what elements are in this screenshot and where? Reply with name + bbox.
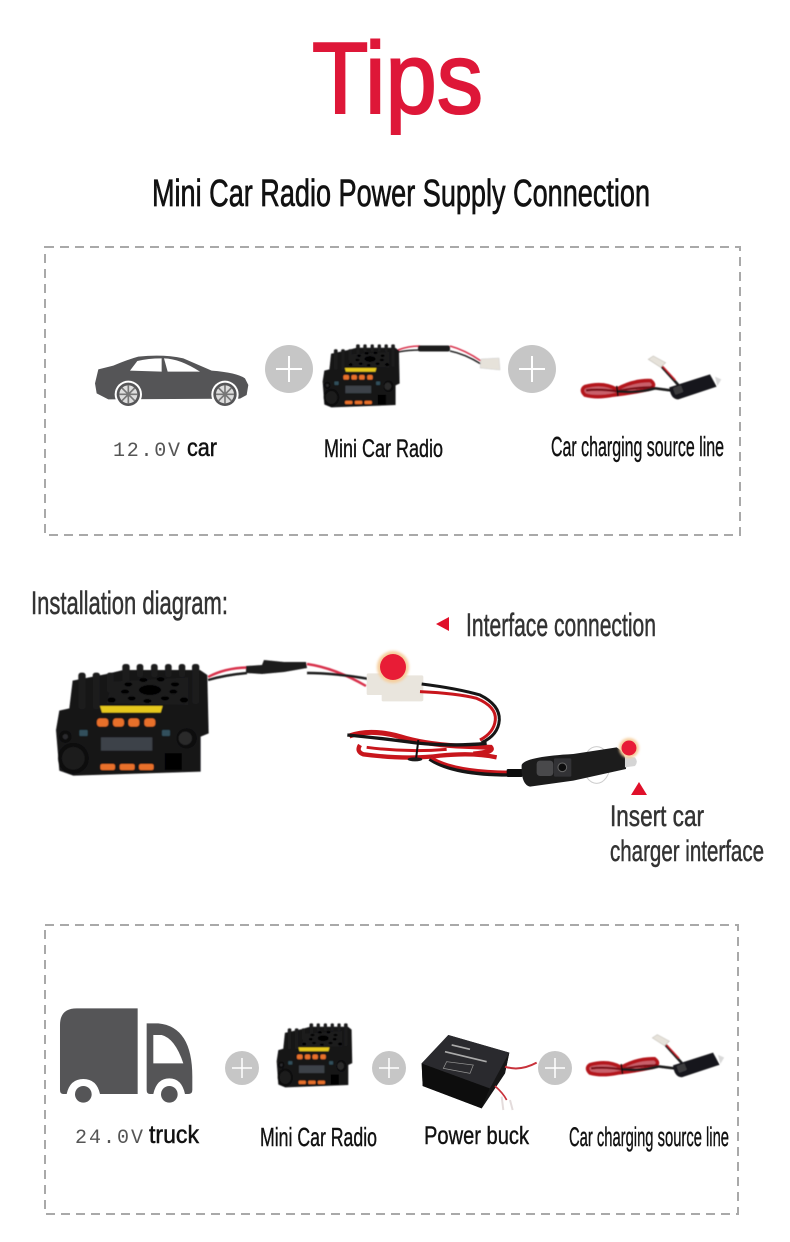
icon: plus two bbox=[508, 345, 556, 393]
icon: plus one bbox=[225, 1051, 259, 1085]
image: power buck converter bbox=[422, 1035, 537, 1110]
image: mini car radio bbox=[277, 1023, 352, 1087]
callout: interface connection bbox=[436, 607, 656, 643]
callout: insert car charger interface bbox=[610, 782, 764, 868]
image: mini car radio with lead bbox=[323, 344, 500, 407]
heading: installation diagram: Installation diagram: bbox=[31, 585, 228, 621]
image: car charging cable bbox=[582, 356, 721, 399]
marker: plug dot bbox=[619, 738, 639, 758]
callout: interface connection: Interface connection bbox=[466, 607, 656, 643]
icon: truck bbox=[60, 1008, 192, 1103]
panel: 12V car connection bbox=[45, 247, 740, 535]
panel: 24V truck connection bbox=[45, 925, 738, 1214]
label: power buck: Power buck bbox=[424, 1122, 529, 1150]
image: mini car radio large bbox=[56, 664, 209, 776]
label: car: car bbox=[187, 434, 217, 462]
icon: plus one bbox=[265, 345, 313, 393]
label: mini car radio: Mini Car Radio bbox=[260, 1122, 377, 1152]
label: mini car radio: Mini Car Radio bbox=[324, 435, 443, 463]
icon: car bbox=[95, 356, 248, 408]
label: truck: truck bbox=[149, 1121, 199, 1149]
icon: plus two bbox=[372, 1051, 406, 1085]
diagram: radio wired to charger cable bbox=[56, 651, 639, 787]
icon: plus three bbox=[538, 1051, 572, 1085]
callout: insert car charger interface: Insert car bbox=[610, 800, 704, 833]
title: Tips bbox=[312, 23, 483, 135]
image: charger cable large bbox=[347, 673, 637, 787]
image: car charging cable bbox=[588, 1035, 724, 1077]
marker: interface dot bbox=[377, 651, 409, 683]
label: 12.0V: 12.0V bbox=[113, 440, 180, 463]
lead wires bbox=[208, 660, 369, 686]
label: 24.0V: 24.0V bbox=[75, 1127, 143, 1150]
